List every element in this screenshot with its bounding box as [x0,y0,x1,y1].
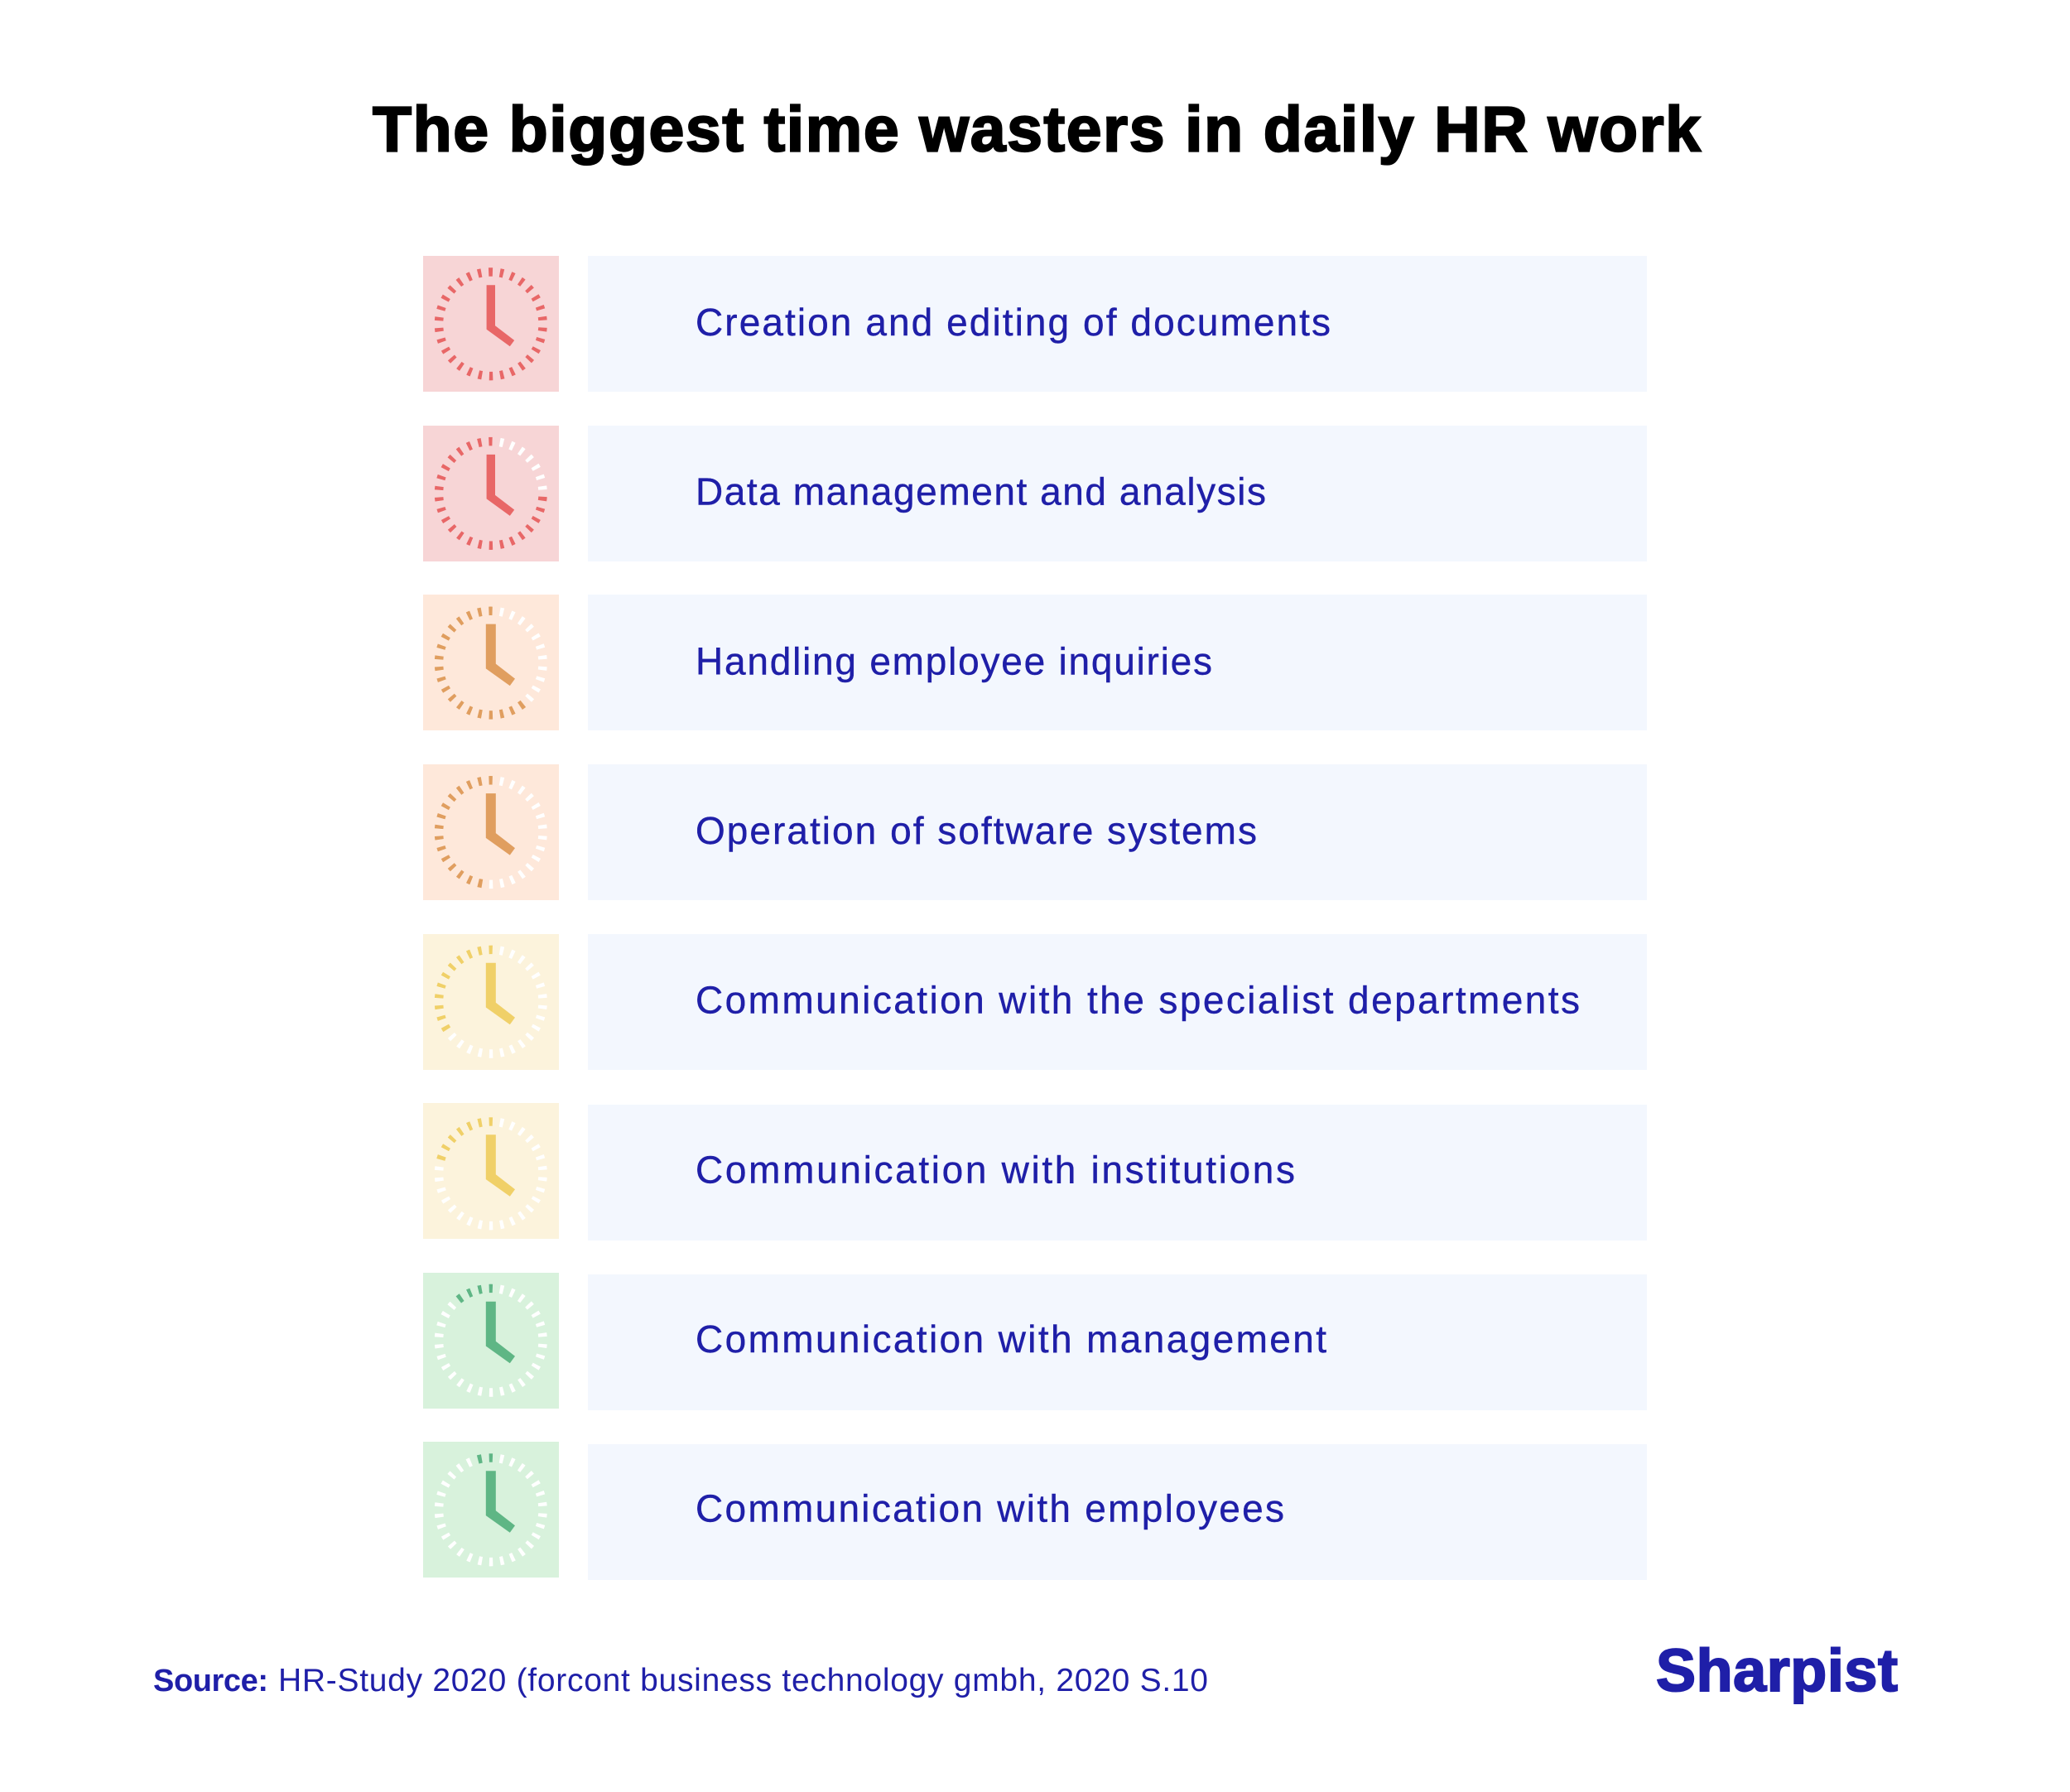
icon: clock, 11 ticks filled, yellow [419,930,562,1073]
icon: clock, 15 ticks filled, orange [423,764,559,900]
text bar [588,256,1647,392]
row 7: communication with management [418,1268,1647,1414]
icon: clock, 23 ticks filled, red [423,426,559,561]
text bar: Data management and analysis [696,470,1266,513]
icon: clock, 4 ticks filled, green [418,1268,564,1414]
title: The biggest time wasters in daily HR work [373,94,1701,166]
text bar [588,1274,1647,1410]
text bar: Creation and editing of documents [696,301,1331,344]
row 4: operation of software systems [423,764,1647,900]
text bar: Operation of software systems [696,809,1257,852]
source line: HR-Study 2020 (forcont business technology gmbh, 2020 S.10 [278,1663,1208,1698]
text bar [588,764,1647,900]
text bar: Communication with the specialist departments [696,979,1580,1022]
icon: clock, 7 ticks filled, yellow [423,1103,559,1239]
logo: Sharpist: Sharpist [1656,1638,1898,1704]
row 6: communication with institutions [423,1103,1647,1240]
text bar [588,595,1647,730]
text bar [588,1444,1647,1580]
source line: Source: [153,1664,268,1698]
row 5: communication with the specialist departments [419,930,1647,1073]
text bar: Communication with management [696,1318,1326,1361]
icon: clock, 19 ticks filled, orange [418,590,564,736]
text bar [588,426,1647,561]
row 2: data management and analysis [423,426,1647,561]
icon: clock, all ticks filled, red [423,256,559,392]
row 3: handling employee inquiries [418,590,1647,736]
row 8: communication with employees [423,1442,1647,1580]
row 1: creation and editing of documents [423,256,1647,392]
text bar: Handling employee inquiries [696,639,1212,682]
text bar [588,934,1647,1070]
text bar: Communication with institutions [696,1148,1295,1191]
text bar [588,1105,1647,1240]
icon: clock, 2 ticks filled, green [423,1442,559,1578]
text bar: Communication with employees [696,1487,1284,1530]
